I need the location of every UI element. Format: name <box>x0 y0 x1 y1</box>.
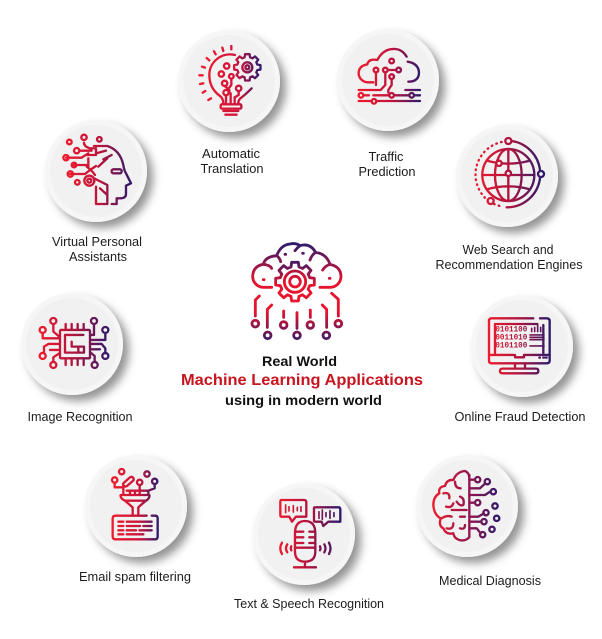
label <box>436 243 582 272</box>
label: Automatic <box>202 147 260 161</box>
heading: real world: Real World <box>262 353 337 369</box>
icon: funnel filtering email <box>112 469 158 539</box>
icon: globe with orbit <box>476 138 544 207</box>
heading: using in modern world: using in modern world <box>225 392 382 408</box>
label: Medical Diagnosis <box>439 574 541 588</box>
label <box>52 235 142 264</box>
badge circle <box>178 30 280 132</box>
badge circle <box>337 29 439 131</box>
icon: monitor with binary data: 0011010 <box>495 333 528 342</box>
badge circle <box>456 125 558 227</box>
icon: monitor with binary data: 0101100 <box>495 341 528 350</box>
label <box>200 147 264 176</box>
label: Traffic <box>368 150 404 164</box>
central block <box>181 244 423 408</box>
label: Online Fraud Detection <box>454 410 586 424</box>
panel: image recognition <box>21 293 133 424</box>
icon: AI head <box>63 135 131 204</box>
badge circle <box>253 483 355 585</box>
panel: web search <box>436 125 582 272</box>
label: Virtual Personal <box>52 235 142 249</box>
label: Translation <box>200 162 264 176</box>
label: Assistants <box>69 250 127 264</box>
panel: email spam filtering <box>79 455 191 584</box>
panel: online fraud detection <box>454 295 586 424</box>
icon: monitor with binary data: 0101100 <box>495 325 528 334</box>
badge circle <box>85 455 187 557</box>
panel: medical diagnosis <box>416 455 541 588</box>
heading: machine learning applications: Machine Learning Applications <box>181 372 423 389</box>
badge circle <box>416 455 518 557</box>
panel: traffic prediction <box>337 29 439 179</box>
icon: cloud with circuit <box>359 49 420 104</box>
label <box>358 150 416 179</box>
icon: cloud brain with gear and circuit <box>252 244 342 339</box>
icon: brain with circuit <box>433 471 499 540</box>
icon: light bulb with gear <box>199 46 260 115</box>
icon: microphone with speech bubbles <box>280 500 340 567</box>
badge circle <box>45 120 147 222</box>
label: Image Recognition <box>28 410 133 424</box>
badge circle <box>471 295 573 397</box>
panel: virtual personal assistants <box>45 120 147 264</box>
label: Web Search and <box>462 243 554 257</box>
label: Email spam filtering <box>79 570 191 584</box>
icon: monitor with binary data <box>489 318 550 373</box>
panel: text and speech recognition <box>234 483 384 611</box>
label: Text & Speech Recognition <box>234 597 384 611</box>
label: Prediction <box>358 165 416 179</box>
label: Recommendation Engines <box>436 258 582 272</box>
badge circle <box>21 293 123 395</box>
icon: processor chip <box>40 318 108 368</box>
panel: automatic translation <box>178 30 280 176</box>
